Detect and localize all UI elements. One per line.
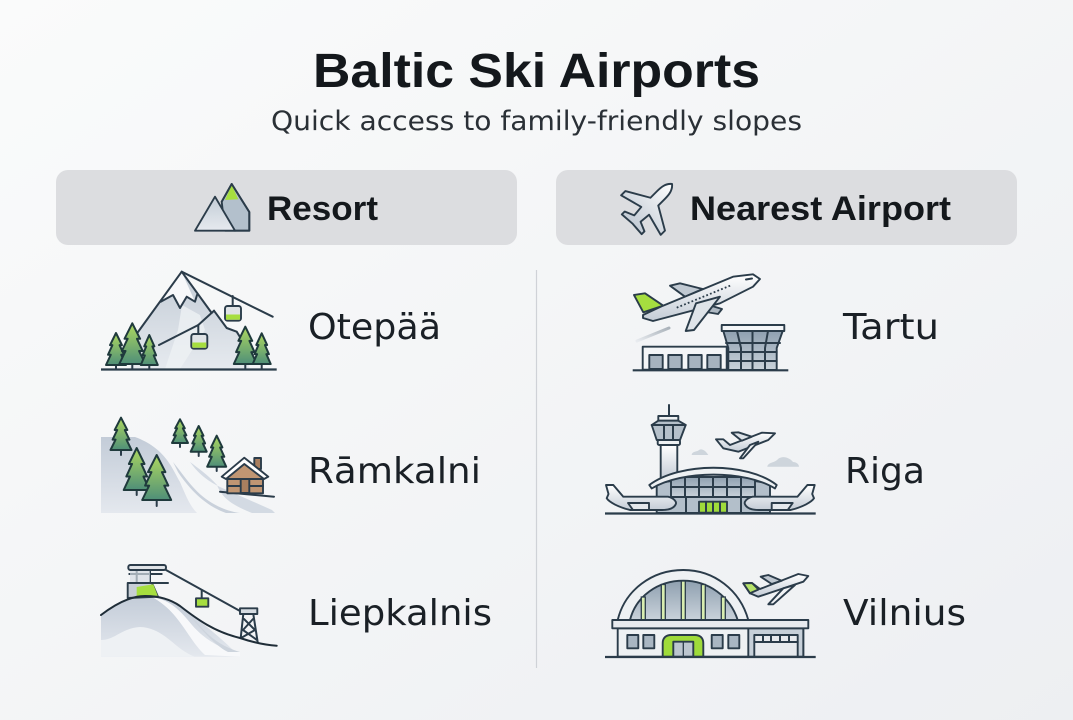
icon: plane — [612, 164, 692, 244]
icon: mountains — [195, 184, 249, 231]
header label: resort: Resort — [267, 190, 378, 228]
icon: riga airport — [605, 405, 816, 514]
icon: rāmkalni slope with cabin — [101, 418, 275, 513]
icon: liepkalnis hill with chairlift — [101, 565, 277, 657]
panel: resort header — [56, 170, 517, 245]
icon: vilnius airport — [605, 570, 816, 657]
label: rāmkalni: Rāmkalni — [308, 451, 481, 492]
label: vilnius: Vilnius — [843, 593, 966, 634]
label: tartu: Tartu — [842, 307, 939, 348]
title: Baltic Ski Airports — [313, 45, 760, 98]
label: liepkalnis: Liepkalnis — [308, 593, 492, 634]
column divider — [536, 270, 538, 668]
icon: tartu airport — [633, 274, 788, 370]
label: otepää: Otepää — [308, 307, 441, 348]
subtitle: Quick access to family-friendly slopes — [271, 106, 802, 137]
label: riga: Riga — [845, 451, 925, 492]
header label: nearest airport: Nearest Airport — [690, 190, 951, 228]
icon: otepää mountain with gondolas — [101, 272, 277, 370]
panel: airport header — [556, 164, 1017, 245]
